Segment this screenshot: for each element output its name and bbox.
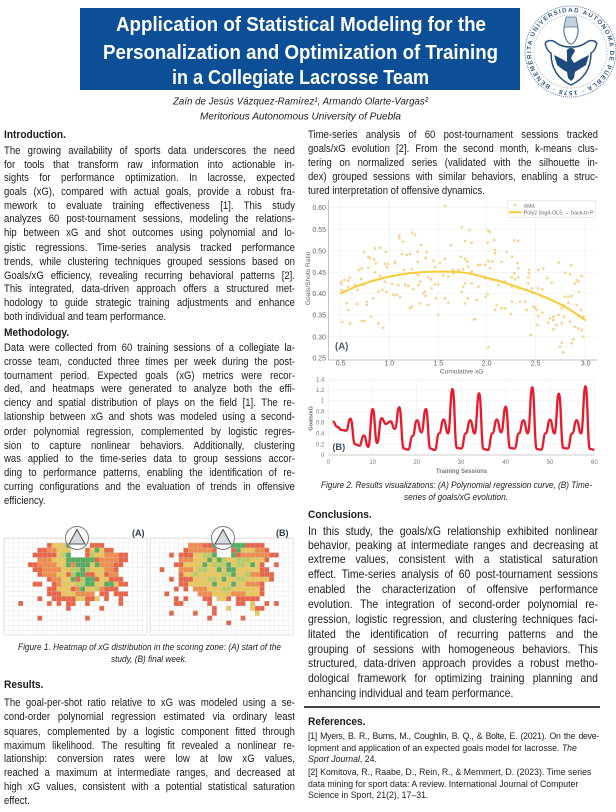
x-axis tick labels: 1.0: [384, 360, 394, 367]
authors and affiliation: Meritorious Autonomous University of Puebla: [200, 112, 401, 122]
y-axis tick labels: 0.50: [312, 248, 326, 255]
university seal logo: BENEMÉRITA UNIVERSIDAD AUTÓNOMA DE PUEBLA · 1578 ·: [526, 8, 614, 96]
text block: conclusions: enabled the characterization of offensive performance: [308, 583, 598, 596]
text block: methodology: tournament period. Expected goals (xG) metrics were recor-: [4, 370, 295, 382]
y-axis tick labels: 0.30: [312, 334, 326, 341]
icon: goal crease A: [65, 526, 89, 550]
y-axis tick labels: [312, 205, 326, 362]
text block: conclusions: evolution. The integration of second-order polynomial re-: [308, 598, 598, 611]
y-axis label: Goals/Shots Ratio: [305, 251, 312, 305]
text block: time-series analysis: dex) grouped sessions with similar behaviors, enabling a struc-: [308, 171, 598, 183]
text block: conclusions: grouping of sessions with homogeneous behaviors. This: [308, 643, 598, 656]
text block: introduction: both individual and team performance.: [4, 311, 166, 323]
figure 1: heatmaps of xG distribution: [4, 526, 294, 636]
text block: methodology: ciency and spatial distribution of plays on the field [1]. The re-: [4, 397, 295, 409]
text block: results: squares, complemented by a logistic component fitted through: [4, 726, 295, 738]
text block: introduction: hodology to guide strategic training adjustments and enhance: [4, 297, 295, 309]
text block: references: data mining for sport data: A review. International Journal of Computer: [308, 779, 578, 789]
panel label A: (A): [335, 341, 348, 352]
text block: methodology: lationship between xG and shots was modeled using a second-: [4, 411, 295, 423]
heading: results: Results.: [4, 679, 43, 691]
x-axis tick labels: 2.0: [482, 360, 492, 367]
text block: conclusions: effect. Time-series analysis of 60 post-tournament sessions: [308, 568, 598, 581]
authors and affiliation: Zaín de Jesús Vázquez-Ramírez¹, Armando Olarte-Vargas²: [172, 96, 429, 108]
heading: methodology: Methodology.: [4, 327, 69, 339]
y-axis tick labels: 0.8: [316, 410, 325, 416]
y-axis tick labels: 0.55: [312, 227, 326, 234]
chart A: polynomial regression scatter: [305, 200, 598, 375]
text block: time-series analysis: tering on normalized series (validated with the silhouette in-: [308, 157, 598, 169]
text block: introduction: gistic regressions. Time-series analysis tracked performance: [4, 242, 295, 254]
text block: results: reached a maximum at intermediate ranges, and decreased at: [4, 767, 295, 779]
x-axis tick labels: 0: [327, 460, 331, 466]
scatter points: [341, 206, 583, 352]
x-axis label: Cumulative xG: [440, 368, 483, 375]
y-axis tick labels: 0: [321, 453, 325, 459]
title banner: Personalization and Optimization of Training: [103, 41, 498, 64]
heatmap B: [150, 538, 294, 636]
authors and affiliation: [172, 96, 429, 122]
x-axis tick labels: 2.5: [531, 360, 541, 367]
text block: methodology: crosse team, conducted three times per week during the post-: [4, 356, 295, 368]
text block: results: high xG values, consistent with a potential statistical saturation: [4, 781, 295, 793]
x-axis tick labels: 0.5: [336, 360, 346, 367]
text block: results: cond-order polynomial regression estimated via ordinary least: [4, 711, 295, 723]
y-axis tick labels: 0.6: [316, 420, 325, 426]
text block: conclusions: gression, logistic regression, and clustering techniques faci-: [308, 613, 598, 626]
y-axis tick labels: 0.25: [312, 355, 326, 362]
chart B: time series of goals/xG: [308, 377, 598, 475]
text block: methodology: Data were collected from 60 training sessions of a collegiate la-: [4, 342, 295, 354]
y-axis tick labels: 0.4: [316, 431, 325, 437]
panel label A: (A): [132, 528, 144, 538]
caption: figure 2: series of goals/xG evolution.: [404, 492, 508, 502]
text block: conclusions: extreme values, consistent with a statistical saturation: [308, 553, 598, 566]
legend: data: [524, 203, 536, 209]
text block: results: maximum likelihood. The resulting fit revealed a nonlinear re-: [4, 740, 295, 752]
red goals/xG line: [333, 386, 594, 450]
x-axis tick labels: [327, 460, 598, 466]
text block: references: [2] Komitova, R., Raabe, D., Rein, R., & Memmert, D. (2023). Time series: [308, 767, 591, 777]
text block: time-series analysis: goals/xG evolution [2]. From the second month, k-means clus-: [308, 143, 598, 155]
text block: references: lopment and application of an expected goals model for lacrosse. The: [308, 743, 577, 753]
caption: figure 1: [18, 642, 281, 664]
y-axis tick labels: 0.40: [312, 291, 326, 298]
text block: methodology: order polynomial regression, complemented by logistic regres-: [4, 426, 295, 438]
heading: references: References.: [308, 716, 365, 728]
legend: [508, 201, 596, 217]
text block: methodology: sion to capture nonlinear behaviors. Additionally, clustering: [4, 440, 295, 452]
text block: introduction: Goals/xG efficiency, revealing recurring behavioral patterns [2].: [4, 270, 295, 282]
caption: figure 1: study, (B) final week.: [111, 654, 187, 664]
text block: methodology: efficiency.: [4, 495, 46, 507]
y-axis tick labels: 1.4: [316, 377, 325, 383]
text block: conclusions: [308, 525, 598, 700]
heading: conclusions: Conclusions.: [308, 509, 372, 521]
panel label B: (B): [276, 528, 288, 538]
x-axis tick labels: 1.5: [433, 360, 443, 367]
y-axis tick labels: 0.2: [316, 442, 325, 448]
y-axis tick labels: 0.35: [312, 313, 326, 320]
text block: methodology: ding to performance patterns, enabling the identification of re-: [4, 467, 295, 479]
legend: Poly2 (logit-OLS → back-to P: [524, 210, 594, 216]
x-axis tick labels: 10: [369, 460, 377, 466]
y-axis tick labels: 0.60: [312, 205, 326, 212]
text block: conclusions: structured, data-driven approach provides a robust metho-: [308, 657, 598, 670]
heatmap A: [4, 538, 148, 636]
text block: time-series analysis: Time-series analysis of 60 post-tournament sessions tracked: [308, 129, 598, 141]
text block: introduction: sights for performance optimization. In lacrosse, expected: [4, 172, 295, 184]
y-axis label: Goals/xG: [309, 405, 315, 431]
heading: introduction: Introduction.: [4, 129, 66, 141]
text block: time-series analysis: [308, 129, 598, 197]
x-axis label: Training Sessions: [436, 469, 488, 475]
text block: methodology: curring configurations and the evaluation of trends in offensive: [4, 481, 295, 493]
text block: results: [4, 697, 295, 807]
title banner: [80, 8, 520, 90]
text block: results: lationship: conversion rates were low at low xG values,: [4, 753, 295, 765]
text block: conclusions: litated the identification of recurring patterns and the: [308, 628, 598, 641]
x-axis tick labels: [336, 360, 591, 367]
title banner: in a Collegiate Lacrosse Team: [172, 66, 429, 89]
panel label B: (B): [332, 442, 345, 452]
x-axis tick labels: 30: [458, 460, 465, 466]
text block: methodology: [4, 342, 295, 507]
text block: results: The goal-per-shot ratio relative to xG was modeled using a se-: [4, 697, 295, 709]
x-axis tick labels: 40: [502, 460, 510, 466]
text block: introduction: The growing availability of sports data underscores the need: [4, 145, 295, 157]
text block: references: [1] Myers, B. R., Burns, M., Coughlin, B. Q., & Bolte, E. (2021). On the deve-: [308, 731, 599, 741]
text block: introduction: [4, 145, 295, 323]
x-axis tick labels: 50: [547, 460, 554, 466]
icon: goal crease B: [211, 526, 235, 550]
regression curve: [341, 272, 585, 320]
text block: references: Sport Journal, 24.: [308, 754, 377, 764]
caption: figure 2: [321, 480, 592, 502]
text block: methodology: ded, and heatmaps were generated to analyze both the effi-: [4, 383, 295, 395]
text block: results: effect.: [4, 795, 30, 807]
text block: references: Science in Sport, 21(2), 17–31.: [308, 790, 428, 800]
text block: time-series analysis: tured interpretation of offensive dynamics.: [308, 185, 485, 197]
text block: introduction: analyzes 60 post-tournament sessions, modeling the relations-: [4, 213, 295, 225]
text block: conclusions: In this study, the goals/xG relationship exhibited nonlinear: [308, 525, 598, 538]
divider rule above references: [304, 706, 600, 708]
text block: conclusions: dological framework for optimizing training planning and: [308, 672, 598, 685]
text block: methodology: was applied to the time-series data to group sessions accor-: [4, 453, 295, 465]
y-axis tick labels: 1: [321, 399, 325, 405]
title banner: Application of Statistical Modeling for the: [116, 13, 486, 36]
text block: introduction: This integrated, data-driven approach offers a structured met-: [4, 283, 295, 295]
y-axis tick labels: [316, 377, 325, 459]
text block: introduction: for tools that transform raw information into actionable in-: [4, 159, 295, 171]
text block: conclusions: enhancing individual and team performance.: [308, 687, 513, 700]
y-axis tick labels: 0.45: [312, 270, 326, 277]
text block: references: [308, 731, 599, 800]
x-axis tick labels: 20: [413, 460, 421, 466]
text block: introduction: hip between xG and shot outcomes using polynomial and lo-: [4, 227, 295, 239]
text block: introduction: trends, while clustering techniques grouped sessions based on: [4, 256, 295, 268]
text block: introduction: goals (xG), compared with actual goals, provide a robust fra-: [4, 186, 295, 198]
caption: figure 1: Figure 1. Heatmap of xG distribution in the scoring zone: (A) start of the: [18, 642, 281, 652]
x-axis tick labels: 60: [591, 460, 598, 466]
text block: conclusions: behavior, peaking at intermediate ranges and decreasing at: [308, 539, 598, 552]
text block: introduction: mework to evaluate training effectiveness [1]. This study: [4, 200, 295, 212]
y-axis tick labels: 1.2: [316, 388, 325, 394]
x-axis tick labels: 3.0: [581, 360, 591, 367]
